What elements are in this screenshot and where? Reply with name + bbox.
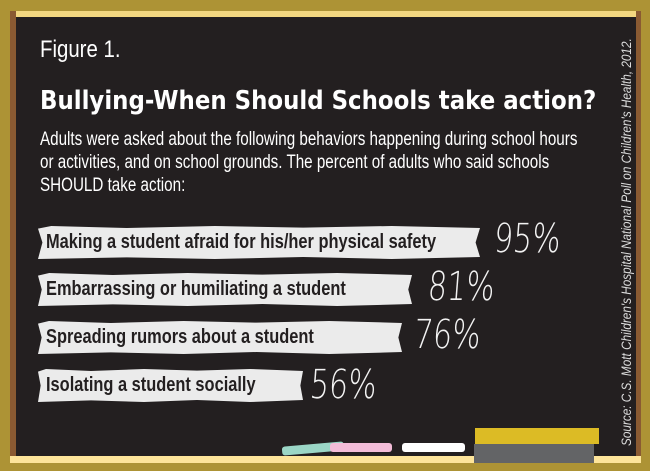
bar: isolating xyxy=(38,369,303,402)
value 95%: 95% xyxy=(492,216,562,262)
chalk pieces xyxy=(282,442,465,456)
value 76%: 76% xyxy=(412,312,482,358)
label: isolating: Isolating a student socially xyxy=(46,374,256,396)
bar: rumors xyxy=(38,321,402,354)
figure label: Figure 1. xyxy=(40,36,121,63)
title: Bullying-When Should Schools take action? xyxy=(40,86,596,116)
source (rotated): Source: C.S. Mott Children's Hospital National Poll on Children's Health, 2012. xyxy=(618,38,634,446)
label: physical safety: Making a student afraid for his/her physical safety xyxy=(46,231,436,253)
bar: physical safety xyxy=(38,226,480,259)
label: rumors: Spreading rumors about a student xyxy=(46,326,314,348)
bar: embarrassing xyxy=(38,273,412,306)
value 81%: 81% xyxy=(426,264,496,310)
eraser xyxy=(474,428,599,463)
label: embarrassing: Embarrassing or humiliating a student xyxy=(46,278,346,300)
value 56%: 56% xyxy=(308,362,378,408)
intro text: Adults were asked about the following behaviors happening during school hours or activities, and on school grounds. The percent of adults who said schools SHOULD take action: xyxy=(40,129,577,196)
